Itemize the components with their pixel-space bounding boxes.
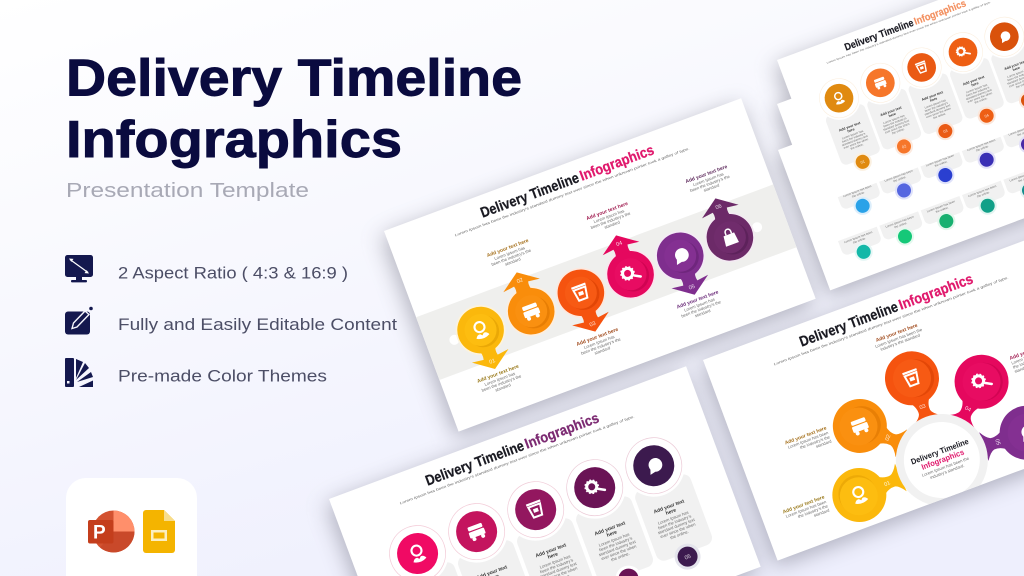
label 02: been the industry's the: [491, 247, 532, 267]
label 01: standard: [494, 382, 512, 393]
step 04 pink, arrow up: [593, 227, 663, 306]
label 05: been the industry's the: [680, 299, 722, 319]
petal 01 yellow: 01: [883, 480, 891, 488]
step 4: Lorem Ipsum has: [965, 83, 988, 94]
step 3: Lorem Ipsum has: [539, 554, 571, 570]
step 5: 05: [684, 554, 692, 561]
step 3: Add your text: [921, 90, 944, 102]
petal 03 red-orange: [885, 351, 939, 422]
end nubs: [448, 221, 764, 346]
petal 01 yellow: [832, 464, 907, 522]
step 02 orange, arrow up: [493, 264, 563, 343]
label 04: [1010, 352, 1024, 373]
step 4: ever since the when: [600, 543, 638, 561]
back slide: blue theme: the online.: [893, 175, 907, 183]
label 05: Lorem Ipsum has: [683, 297, 715, 313]
step 3: been the industry's: [924, 101, 949, 113]
step 2: the online.: [891, 127, 905, 135]
step 5: Add your text: [653, 498, 686, 515]
label 02: [486, 238, 534, 272]
label 06: been the industry's the: [689, 174, 731, 193]
main title: [66, 50, 522, 169]
step 4: Add your text: [594, 520, 627, 537]
step 01 yellow, arrow down: [448, 298, 518, 378]
step 4: been the industry's: [966, 85, 990, 98]
slide title: Infographics: [897, 271, 975, 314]
slide title: [423, 410, 601, 490]
label 06: Add your text here: [685, 164, 728, 185]
slide subtitle: Lorem Ipsum has been the industry's standard dummy text ever since the when unknown printer took a galley of type.: [826, 1, 992, 65]
step 5: ever since the when: [659, 521, 697, 539]
feature: color themes: Pre-made Color Themes: [118, 366, 327, 386]
step 4: the online.: [974, 96, 988, 105]
subtitle: Presentation Template: [66, 180, 309, 202]
icon: edit pen: [65, 307, 93, 334]
feature: editable: [65, 307, 397, 334]
petal 04 pink: 04: [964, 405, 972, 414]
step 2: Lorem Ipsum has: [883, 113, 906, 125]
label 01: Lorem Ipsum has been: [785, 499, 828, 519]
step 06 plum, arrow up: 06: [715, 203, 723, 211]
feature: aspect ratio: 2 Aspect Ratio ( 4:3 & 16:9 ): [118, 264, 348, 282]
slide title: Infographics: [578, 142, 656, 185]
step 5: [976, 9, 1024, 116]
label 01: Lorem Ipsum has: [484, 371, 516, 387]
step 4: ever since the when: [967, 91, 993, 104]
label 03: Lorem Ipsum has been the: [874, 327, 923, 349]
step 5: Lorem Ipsum has: [657, 510, 689, 526]
label 03: [576, 327, 624, 360]
step 3: here: [547, 551, 559, 561]
central hub: Infographics: [920, 447, 966, 472]
back slide: green theme: [778, 57, 1024, 290]
step 3: [496, 470, 603, 576]
step 4: here: [971, 81, 979, 87]
step 04 pink, arrow up: 04: [615, 240, 623, 248]
label 05: [676, 289, 724, 323]
cards: [397, 472, 714, 576]
step 1: Add your text: [838, 121, 862, 133]
app badge card: [66, 478, 197, 576]
step 1: [378, 514, 485, 576]
step 4: standard dummy text: [965, 88, 992, 101]
slide shadows: [327, 0, 1024, 576]
back slide: blue theme: the online.: [851, 190, 866, 199]
step 3: ever since the when: [926, 106, 952, 119]
label 04: been the industry's the: [590, 210, 632, 230]
central hub: Lorem Ipsum has been the: [921, 455, 970, 478]
label 06: Lorem Ipsum has: [692, 171, 724, 187]
step 5: here: [1012, 66, 1021, 72]
label 03: industry's the standard: [880, 332, 921, 352]
step 2: here: [888, 112, 897, 118]
label 01: [476, 364, 525, 397]
label 03: Add your text here: [875, 323, 919, 344]
slide: arrow timeline (centre): [384, 98, 816, 432]
back slide: green theme: the online.: [852, 236, 867, 245]
back slide: green theme: Lorem Ipsum has been: [843, 230, 873, 244]
step 05 purple, arrow down: 05: [688, 284, 696, 292]
label 03: standard: [594, 345, 611, 356]
step 5: here: [665, 507, 677, 517]
back slide: green theme: the online.: [976, 190, 991, 198]
step 2: been the industry's: [883, 116, 908, 128]
icon: Google Slides: [143, 510, 175, 553]
slide: radial timeline (bottom right): [703, 227, 1024, 569]
step 4: [555, 448, 662, 576]
slide subtitle: Lorem Ipsum has been the industry's standard dummy text ever since the when unknown printer took a galley of type.: [399, 415, 635, 505]
label 04: standard: [604, 219, 621, 230]
back slide: blue theme: Lorem Ipsum has been: [925, 153, 955, 167]
central hub: Delivery Timeline: [910, 437, 970, 467]
step 4: Lorem Ipsum has: [598, 532, 630, 548]
step 1: Lorem Ipsum has: [841, 129, 864, 140]
step 06 plum, arrow up: [692, 190, 762, 269]
petal 02 orange: 02: [885, 434, 892, 442]
feature: aspect ratio: [65, 255, 348, 282]
slide title: Delivery Timeline: [843, 18, 916, 54]
label 04: [585, 201, 634, 235]
label 01: standard: [813, 507, 831, 518]
step 1: the online.: [850, 142, 864, 151]
step 1: been the industry's: [842, 131, 866, 144]
petal 05 purple: 05: [993, 438, 1001, 446]
step 1: ever since the when: [843, 137, 869, 150]
label 02: standard: [504, 256, 522, 267]
slide: dark card timeline (bottom centre): [329, 366, 761, 576]
slide title: [843, 0, 968, 54]
petal 02 orange: [832, 399, 908, 457]
step 3: the online.: [933, 111, 947, 120]
label 03: been the industry's the: [580, 336, 622, 356]
step 2: Add your text: [880, 105, 903, 117]
slide subtitle: Lorem Ipsum has been the industry's standard dummy text ever since the when unknown printer took a galley of type.: [773, 276, 1009, 366]
step 4: [935, 24, 1010, 132]
step 02 orange, arrow up: 02: [516, 277, 524, 285]
back slide: green theme: Lorem Ipsum has been: [885, 215, 915, 229]
label 05: standard: [694, 308, 712, 318]
slide title: [478, 142, 656, 222]
label 02: standard: [815, 438, 833, 449]
step 3: here: [929, 96, 938, 103]
grey band: [416, 184, 797, 380]
cards: [824, 41, 1024, 166]
step 5: the online.: [669, 529, 689, 540]
back slide: green theme: the online.: [894, 221, 908, 229]
step 1: 01: [860, 160, 866, 165]
label 02: the industry's the: [799, 434, 831, 450]
back slide: blue theme: the online.: [934, 159, 948, 168]
back slide: blue theme: Lorem Ipsum has been: [884, 169, 914, 183]
step 3: 03: [943, 129, 948, 134]
slide title: Infographics: [523, 410, 601, 453]
label 04: Lorem Ipsum has: [593, 208, 625, 224]
step 2: [437, 492, 544, 576]
step 03 red-orange, arrow down: [549, 261, 619, 340]
slide subtitle: Lorem Ipsum has been the industry's standard dummy text ever since the when unknown printer took a galley of type.: [454, 147, 690, 237]
slide title: Delivery Timeline: [478, 170, 581, 222]
step 3: standard dummy text: [924, 103, 951, 116]
step 05 purple, arrow down: [648, 224, 718, 303]
icon: PowerPoint: P: [93, 522, 106, 544]
label 04: Add your text here: [585, 201, 629, 222]
step 2: standard dummy text: [883, 118, 910, 132]
label 06: standard: [703, 182, 721, 193]
label 01: Add your text here: [476, 364, 520, 385]
label 03: Lorem Ipsum has: [583, 334, 615, 350]
label 03: Add your text here: [576, 327, 619, 348]
step 4: here: [606, 529, 618, 539]
step 2: [852, 55, 928, 163]
step 5: [614, 426, 721, 576]
step 4: been the industry's: [598, 535, 633, 552]
step 5: been the industry's: [657, 513, 692, 530]
slide title: Delivery Timeline: [423, 438, 526, 490]
label 01: been the industry's the: [481, 373, 523, 393]
back slide: green theme: Lorem Ipsum has been: [926, 199, 956, 213]
step 3: Add your text: [535, 542, 567, 559]
step 1: here: [847, 127, 855, 134]
step 4: Add your text: [962, 75, 986, 86]
step 2: ever since the when: [884, 122, 910, 135]
back slide: blue theme: [777, 11, 1024, 244]
back slide: green theme: the online.: [935, 205, 949, 214]
step 3: [894, 40, 969, 147]
feature: color themes: [65, 358, 327, 387]
petal 03 red-orange: 03: [919, 403, 927, 411]
label 02: Add your text here: [784, 425, 828, 446]
step 3: been the industry's: [539, 557, 574, 574]
slide title: Delivery Timeline: [797, 299, 900, 351]
step 4: 04: [984, 113, 990, 119]
label 05: Add your text here: [676, 289, 720, 310]
label 06: [685, 164, 733, 198]
step 1: [811, 70, 886, 178]
main title: Infographics: [66, 111, 402, 169]
label 02: Lorem Ipsum has: [494, 245, 526, 261]
feature: editable: Fully and Easily Editable Content: [118, 315, 397, 334]
central hub: [896, 414, 988, 504]
step 2: 02: [901, 144, 907, 149]
step 5: standard dummy text: [657, 517, 696, 535]
label 02: Lorem Ipsum has been: [787, 430, 830, 450]
back slide: blue theme: the online.: [975, 144, 990, 152]
icon: swatch fan: [65, 358, 93, 387]
step 01 yellow, arrow down: 01: [489, 358, 496, 366]
step 03 red-orange, arrow down: 03: [589, 321, 597, 328]
slide: orange theme (top right): [777, 0, 1024, 200]
main title: Delivery Timeline: [66, 50, 522, 108]
step 3: Lorem Ipsum has: [924, 98, 947, 110]
back slide: green theme: Lorem Ipsum has been: [967, 184, 997, 198]
back slide: blue theme: Lorem Ipsum has been: [966, 138, 996, 152]
step 4: standard dummy text: [598, 539, 637, 557]
step 4: the online.: [610, 551, 630, 562]
petal 05 purple: [979, 406, 1024, 461]
slide title: [798, 276, 973, 347]
label 01: the industry's the: [797, 503, 829, 519]
step 1: standard dummy text: [841, 134, 868, 147]
petal 04 pink: [950, 354, 1009, 428]
icon: monitor: [65, 255, 93, 282]
central hub: industry's standard.: [929, 463, 965, 480]
back slide: blue theme: Lorem Ipsum has been: [842, 184, 872, 198]
label 01: Add your text here: [782, 494, 826, 515]
label 02: Add your text here: [486, 238, 530, 259]
